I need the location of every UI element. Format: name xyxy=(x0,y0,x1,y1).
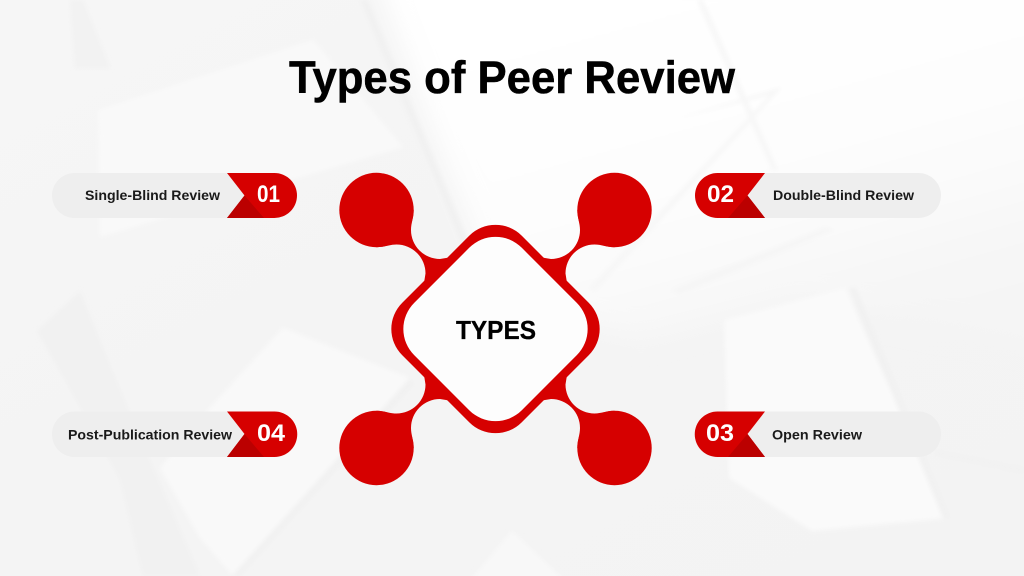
item 02: Double-Blind Review xyxy=(695,173,941,218)
node: top left xyxy=(339,173,449,283)
item 04: Post-Publication Review: Post-Publication Review xyxy=(68,426,232,442)
node: bottom left xyxy=(339,375,449,485)
item 03: Open Review xyxy=(695,412,941,457)
item 02: Double-Blind Review: 02 xyxy=(707,181,734,208)
item 04: Post-Publication Review xyxy=(52,412,297,457)
title: Types of Peer Review xyxy=(289,52,736,103)
item 02: Double-Blind Review: Double-Blind Review xyxy=(773,187,914,203)
item 01: Single-Blind Review xyxy=(52,173,297,218)
item 01: Single-Blind Review: Single-Blind Review xyxy=(85,187,220,203)
hub: red rounded diamond xyxy=(376,209,615,449)
hub label: TYPES xyxy=(456,315,536,345)
central diagram: hub with four nodes xyxy=(339,173,652,485)
item 03: Open Review: Open Review xyxy=(772,426,862,442)
node: bottom right xyxy=(542,375,652,485)
item 04: Post-Publication Review: 04 xyxy=(257,420,286,447)
item 03: Open Review: 03 xyxy=(706,420,734,447)
node: top right xyxy=(542,173,652,283)
item 01: Single-Blind Review: 01 xyxy=(257,181,280,208)
hub: white inner diamond xyxy=(388,222,603,436)
